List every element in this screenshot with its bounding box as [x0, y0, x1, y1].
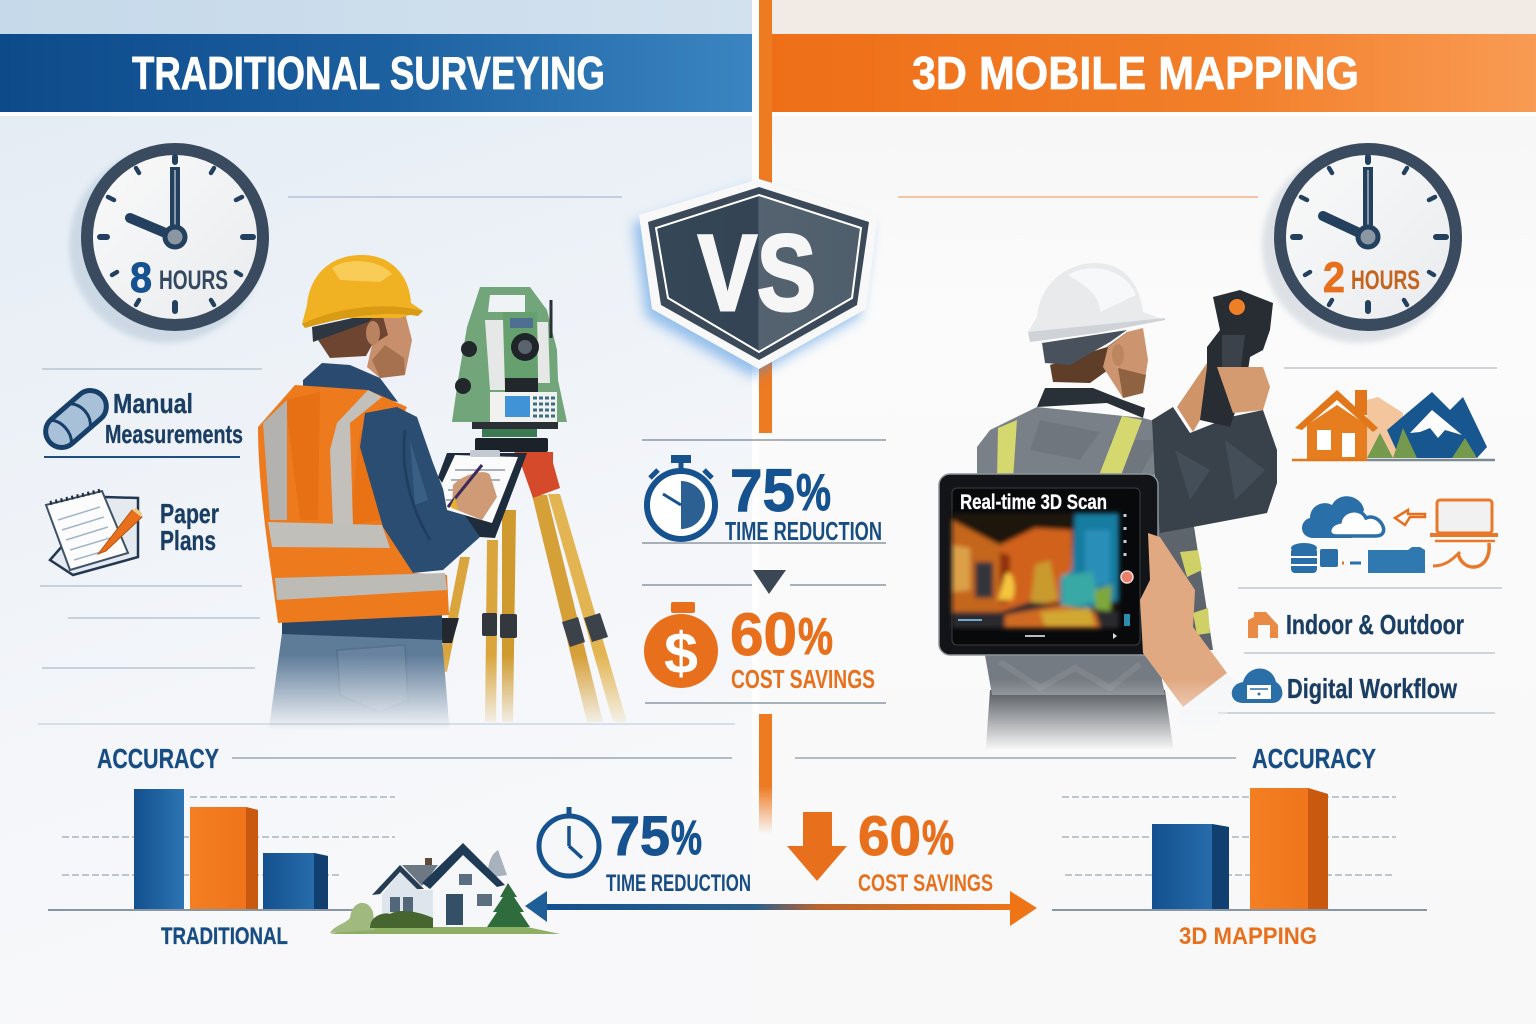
- stat: bottom 60% cost savings: COST SAVINGS: [858, 870, 993, 897]
- heading: 3D mobile mapping: 3D MOBILE MAPPING: [912, 47, 1359, 99]
- arrow: down triangle: [753, 570, 786, 594]
- clock: 8 hours: 8: [130, 254, 152, 302]
- stat: 75% time reduction: 75: [730, 457, 795, 524]
- stat: bottom 60% cost savings: %: [922, 812, 954, 865]
- clock: 8 hours: [69, 149, 263, 343]
- stat: bottom 75% time reduction: TIME REDUCTION: [606, 870, 751, 897]
- stat: bottom 75% time reduction: 75: [610, 804, 670, 867]
- clipboard: [438, 453, 527, 538]
- background: left panel: [0, 0, 752, 1024]
- head: [367, 313, 412, 378]
- centre divider stripes: [752, 0, 772, 834]
- hard hat: [1028, 263, 1160, 332]
- vest lower: [985, 655, 1165, 695]
- jeans: [268, 633, 450, 735]
- icon: cloud data workflow: [1291, 496, 1498, 573]
- icon: stopwatch: [647, 455, 715, 539]
- stat: 60% cost savings: 60: [730, 601, 797, 668]
- stat: 75% time reduction: [647, 455, 882, 546]
- arrow: down: [787, 812, 847, 881]
- chart: 3D mapping accuracy: [1052, 743, 1427, 950]
- tripod: [438, 494, 627, 722]
- stat: 60% cost savings: [644, 601, 875, 694]
- safety vest: [258, 385, 449, 623]
- icon: cloud: [1232, 668, 1282, 703]
- left hand: [1177, 363, 1207, 432]
- arrow: two-way comparison: [525, 891, 1037, 926]
- heading: 3D mobile mapping: [772, 34, 1536, 116]
- vest back: [977, 407, 1155, 476]
- hand with pen: [452, 472, 497, 520]
- tablet: [939, 474, 1158, 655]
- stat: 60% cost savings: COST SAVINGS: [731, 664, 875, 694]
- trousers: [986, 690, 1173, 747]
- hair: [1050, 332, 1127, 383]
- arm: [360, 407, 483, 573]
- chart: 3D mapping accuracy: ACCURACY: [1252, 743, 1376, 774]
- icon: paper plans: [46, 490, 142, 575]
- stat: 75% time reduction: %: [796, 464, 831, 522]
- label: manual measurements: Manual: [113, 388, 193, 419]
- collar: [1037, 388, 1145, 418]
- head strap: [1042, 330, 1127, 365]
- belt: [282, 615, 442, 640]
- icon: measuring tape: [39, 384, 113, 454]
- stat: bottom 75% time reduction: %: [671, 812, 702, 865]
- icon: dollar coin: [644, 602, 718, 688]
- label: paper plans: [160, 498, 219, 556]
- icon: small house: [1248, 612, 1278, 638]
- tablet: Real-time 3D Scan: [960, 491, 1107, 514]
- head: [1103, 328, 1148, 398]
- VS shield badge: [633, 179, 878, 377]
- chart: 3D mapping accuracy: 3D MAPPING: [1179, 923, 1317, 950]
- clock: 8 hours: HOURS: [159, 265, 228, 295]
- label: manual measurements: [105, 388, 243, 449]
- stat: 75% time reduction: TIME REDUCTION: [725, 516, 882, 546]
- stat: 60% cost savings: %: [798, 608, 833, 666]
- label: manual measurements: Measurements: [105, 419, 243, 449]
- scanner: [1200, 290, 1273, 427]
- label: paper plans: Plans: [160, 525, 216, 556]
- scan scene: [952, 513, 1119, 628]
- clock: 2 hours: 2: [1323, 254, 1345, 302]
- raised arm: [1152, 407, 1277, 533]
- top strip: [0, 0, 1536, 34]
- heading: traditional surveying: TRADITIONAL SURVEYING: [132, 47, 605, 99]
- label: digital workflow: Digital Workflow: [1287, 673, 1457, 704]
- stat: bottom 75% time reduction: [539, 804, 751, 897]
- stat: bottom 60% cost savings: [858, 804, 993, 897]
- hard hat: [302, 255, 423, 324]
- background: right panel: [752, 0, 1536, 1024]
- hand on tablet: [1140, 533, 1227, 707]
- stat: bottom 60% cost savings: 60: [858, 804, 921, 867]
- section rules: [38, 197, 1502, 758]
- chart: traditional accuracy: [48, 743, 395, 950]
- vest right side: [1158, 518, 1213, 650]
- icon: dollar coin: $: [664, 621, 698, 686]
- VS shield badge: VS: [698, 212, 816, 333]
- illustration: house: [330, 843, 560, 934]
- right hand: [1217, 367, 1270, 413]
- illustration: mapper with handheld scanner: [939, 263, 1277, 760]
- clock: 2 hours: [1262, 149, 1456, 343]
- label: paper plans: Paper: [160, 498, 219, 529]
- shirt collar: [303, 363, 398, 402]
- hair: [318, 318, 388, 358]
- clock: 2 hours: HOURS: [1351, 265, 1420, 295]
- icon: clock: [539, 807, 599, 876]
- chart: traditional accuracy: ACCURACY: [97, 743, 219, 774]
- total station: [452, 287, 567, 498]
- chart: traditional accuracy: TRADITIONAL: [161, 923, 288, 950]
- illustration: surveyor with total station: [258, 255, 627, 735]
- heading: traditional surveying: [0, 34, 752, 116]
- label: indoor and outdoor: Indoor & Outdoor: [1286, 609, 1464, 640]
- icon: house and mountains: [1292, 390, 1495, 460]
- head strap: [312, 318, 373, 342]
